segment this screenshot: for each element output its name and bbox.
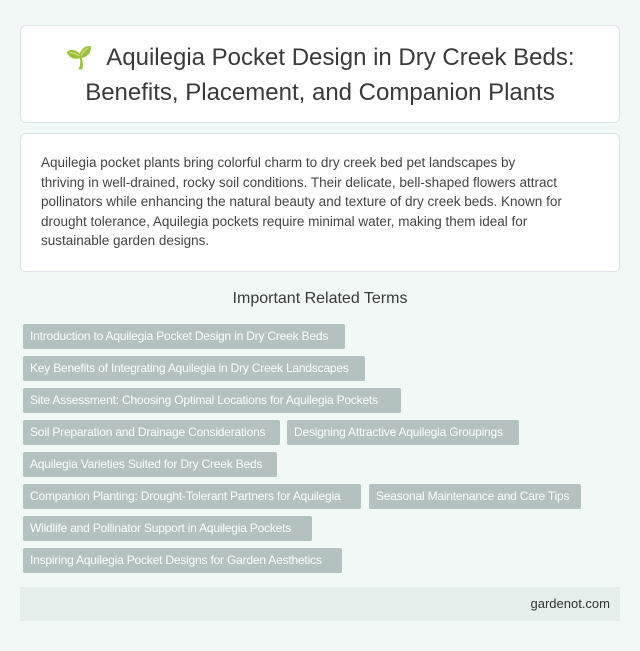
description panel: Aquilegia pocket plants bring colorful charm to dry creek bed pet landscapes by (41, 155, 515, 170)
description panel: sustainable garden designs. (41, 233, 209, 248)
tag: Wildlife and Pollinator Support in Aquilegia Pockets (30, 521, 291, 535)
tag: Site Assessment: Choosing Optimal Locations for Aquilegia Pockets (30, 393, 378, 407)
tag: Introduction to Aquilegia Pocket Design in Dry Creek Beds (30, 329, 328, 343)
description panel: thriving in well-drained, rocky soil conditions. Their delicate, bell-shaped flowers attract (41, 174, 557, 190)
tag: Aquilegia Varieties Suited for Dry Creek Beds (30, 457, 262, 471)
tag (23, 484, 361, 509)
tag: Soil Preparation and Drainage Considerations (30, 425, 265, 439)
title (20, 25, 620, 123)
description panel: drought tolerance, Aquilegia pockets require minimal water, making them ideal for (41, 214, 527, 228)
footer (20, 587, 620, 621)
tag: Seasonal Maintenance and Care Tips (376, 489, 569, 503)
footer: gardenot.com (530, 596, 610, 611)
tag (23, 452, 277, 477)
related terms heading: Important Related Terms (233, 290, 407, 307)
tag (23, 420, 280, 445)
tag (23, 356, 365, 381)
tag (23, 516, 312, 541)
tag (23, 324, 345, 349)
tags (23, 324, 581, 573)
tag (369, 484, 581, 509)
title: Benefits, Placement, and Companion Plants (85, 79, 555, 106)
tag: Companion Planting: Drought-Tolerant Partners for Aquilegia (30, 489, 340, 503)
tag (23, 548, 342, 573)
tag (23, 388, 401, 413)
title: 🌱 Aquilegia Pocket Design in Dry Creek Beds: (66, 44, 574, 71)
tag: Designing Attractive Aquilegia Groupings (294, 425, 503, 439)
tag: Inspiring Aquilegia Pocket Designs for Garden Aesthetics (30, 553, 322, 567)
tag: Key Benefits of Integrating Aquilegia in Dry Creek Landscapes (30, 361, 349, 375)
description panel: pollinators while enhancing the natural beauty and texture of dry creek beds. Known for (41, 194, 562, 209)
description panel (20, 133, 620, 272)
tag (287, 420, 519, 445)
